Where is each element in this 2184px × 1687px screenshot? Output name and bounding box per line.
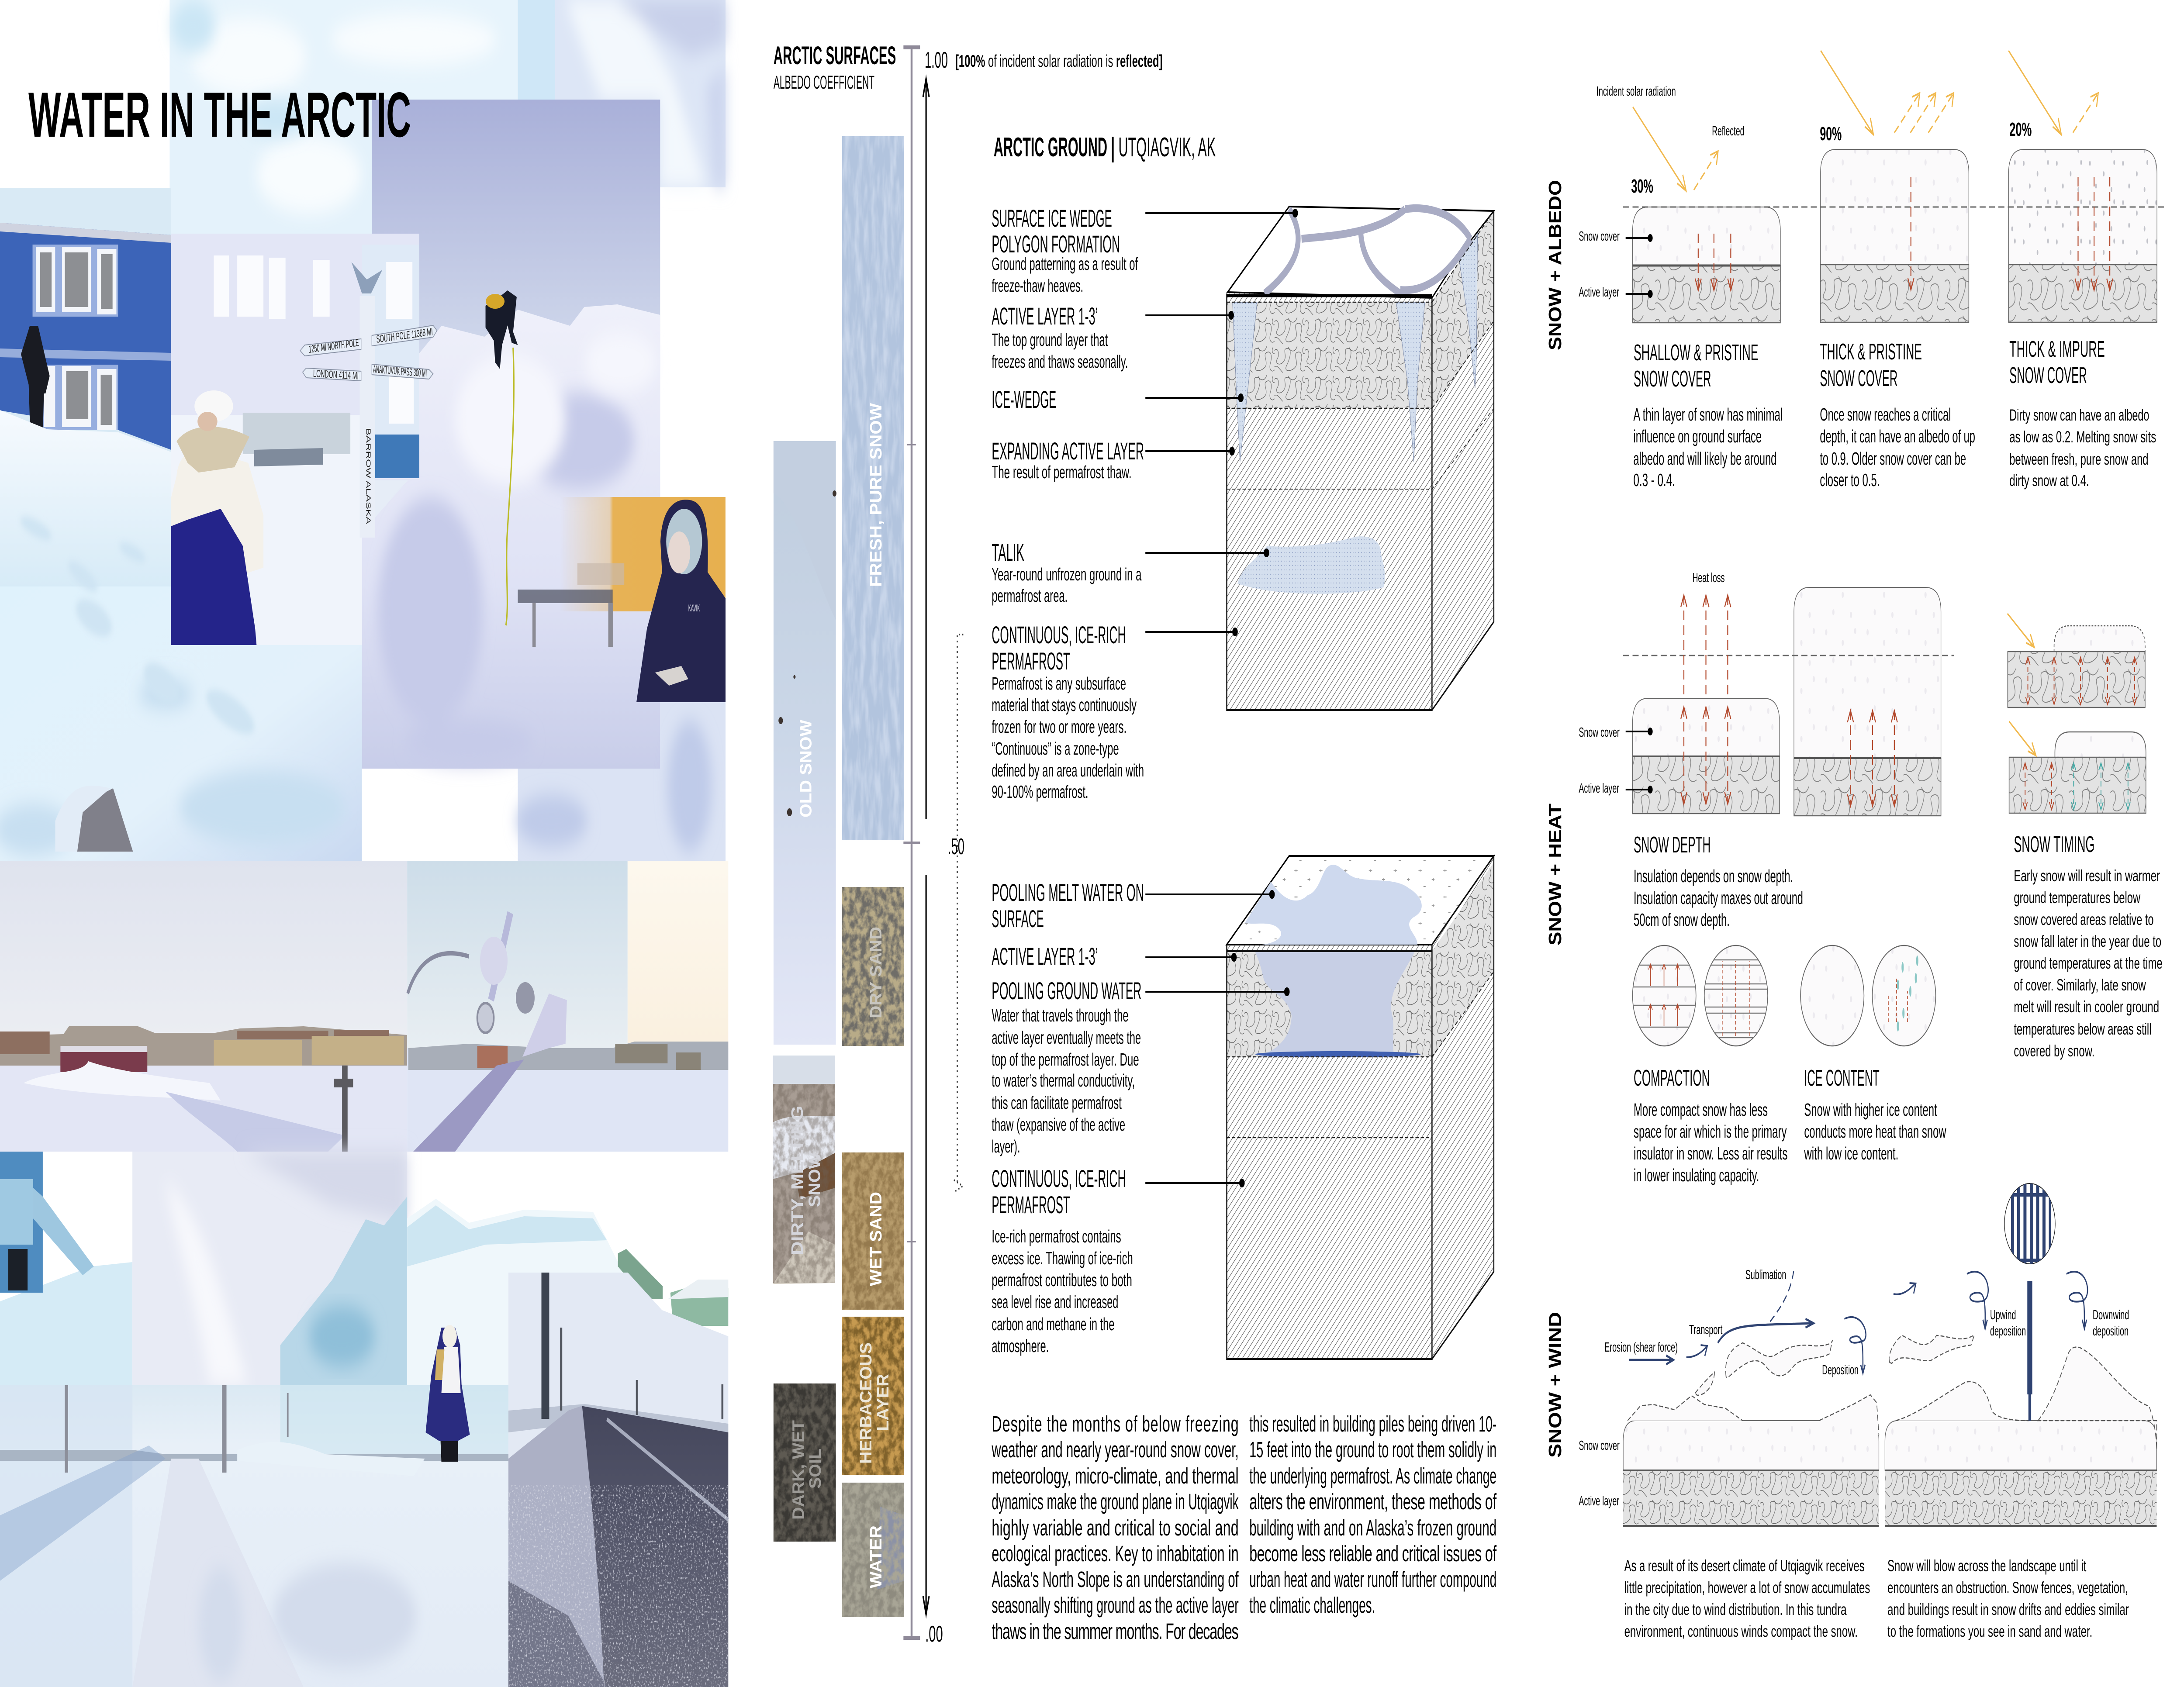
text: obstruction: Snow will blow across the landscape until it bbox=[1887, 1557, 2087, 1575]
leaders bbox=[1626, 235, 1652, 297]
arrow: down to low albedo bbox=[923, 875, 929, 1615]
callout: continuous permafrost: Permafrost is any subsurface bbox=[992, 674, 1126, 694]
section label: SNOW + ALBEDO bbox=[1545, 180, 1565, 350]
text: thick and impure: as low as 0.2. Melting snow sits bbox=[2009, 428, 2156, 446]
text: thick and pristine: to 0.9. Older snow cover can be bbox=[1820, 449, 1966, 469]
callout: continuous permafrost: Ice-rich permafrost contains bbox=[992, 1227, 1121, 1247]
photo: woman with sign post bbox=[171, 234, 437, 645]
callout: surface ice wedge polygon formation: Ground patterning as a result of bbox=[992, 254, 1138, 274]
annotations: Snow cover bbox=[1579, 1439, 1620, 1453]
scale labels bbox=[925, 48, 1162, 1647]
text: shallow and pristine: SNOW COVER bbox=[1634, 367, 1711, 392]
text: snow depth bbox=[1634, 833, 1803, 930]
diagram: open snow surface bbox=[1623, 1395, 1879, 1526]
text block: intro paragraph: 15 feet into the ground to root them solidly in bbox=[1249, 1438, 1496, 1463]
annotations: Heat loss bbox=[1693, 571, 1724, 585]
photo: wind-sculpted snow upper right bbox=[518, 0, 726, 187]
text: snow timing: snow covered areas relative to bbox=[2014, 911, 2154, 928]
text: ice content: with low ice content. bbox=[1804, 1144, 1898, 1164]
text: snow depth: Insulation capacity maxes out around bbox=[1634, 888, 1803, 908]
callout: continuous permafrost: carbon and methane in the bbox=[992, 1314, 1114, 1335]
callout: continuous permafrost: 90-100% permafrost. bbox=[992, 782, 1088, 802]
photo: climber on snow pile bbox=[362, 100, 660, 769]
text: thick and pristine: THICK & PRISTINE bbox=[1820, 340, 1922, 365]
text: snow timing: covered by snow. bbox=[2014, 1042, 2094, 1060]
text: snow timing: ground temperatures at the time bbox=[2014, 954, 2163, 972]
callout: continuous permafrost: PERMAFROST bbox=[992, 648, 1070, 675]
arrows: timing heat bbox=[2023, 657, 2137, 810]
woman figure bbox=[171, 449, 263, 597]
measuring rope bbox=[506, 348, 514, 625]
photo: snow swirl bbox=[132, 1152, 407, 1385]
text: compaction: space for air which is the primary bbox=[1634, 1122, 1787, 1142]
circle: high compaction bbox=[1704, 945, 1768, 1046]
arrowheads: reflected bbox=[1711, 93, 2098, 165]
front face hatch bbox=[1227, 293, 1432, 710]
annotations: Downwind bbox=[2093, 1308, 2129, 1322]
text: obstruction: and buildings result in snow drifts and eddies similar bbox=[1887, 1601, 2129, 1618]
diagram: deep snow depth bbox=[1794, 587, 1941, 816]
annotations: Reflected bbox=[1712, 124, 1744, 138]
callout: continuous permafrost bbox=[992, 1165, 1133, 1356]
photo collage: upper group bbox=[0, 0, 728, 1687]
sign post: SOUTH POLE 11388 MI bbox=[376, 326, 433, 345]
text: snow depth: 50cm of snow depth. bbox=[1634, 910, 1730, 930]
swatch: water bbox=[842, 1483, 904, 1617]
text block: intro paragraph: this resulted in building piles being driven 10- bbox=[1249, 1412, 1496, 1437]
albedo axis bbox=[903, 45, 920, 1640]
callout: surface ice wedge polygon formation: POLYGON FORMATION bbox=[992, 231, 1120, 258]
text: ice content: ICE CONTENT bbox=[1804, 1066, 1880, 1091]
swatch: herbaceous layer: HERBACEOUS bbox=[857, 1342, 875, 1464]
arrows: absorbed radiation bbox=[1695, 177, 2113, 290]
swatch: dirty, melting snow bbox=[773, 1056, 835, 1284]
wind arrows bbox=[1629, 1283, 1916, 1364]
sign post: LONDON 4114 MI bbox=[313, 368, 359, 382]
photo: town panorama bbox=[0, 861, 407, 1152]
photo: white snow mound bbox=[407, 1199, 628, 1385]
panel: snow + heat bbox=[1545, 571, 2163, 1186]
figure on street bbox=[425, 1325, 470, 1462]
text block: intro paragraph: become less reliable and critical issues of bbox=[1249, 1542, 1496, 1566]
drifting snow clouds bbox=[1695, 1335, 1974, 1395]
diagram: shallow snow depth bbox=[1633, 698, 1780, 814]
annotations: Deposition bbox=[1822, 1363, 1859, 1377]
dashed reference line bbox=[1623, 655, 1954, 656]
callout: pooling ground water: top of the permafrost layer. Due bbox=[992, 1050, 1139, 1070]
person in navy parka bbox=[636, 500, 726, 702]
arrows: timing sun bbox=[2008, 614, 2036, 756]
annotations: Upwind bbox=[1990, 1308, 2016, 1322]
text: snow timing: SNOW TIMING bbox=[2014, 832, 2094, 857]
callout: pooling ground water: layer). bbox=[992, 1137, 1020, 1157]
arrows: timing cool bbox=[2071, 763, 2130, 810]
text block: intro paragraph: meteorology, micro-climate, and thermal bbox=[992, 1464, 1239, 1489]
photo: lower right blown snow bbox=[516, 702, 726, 861]
text: shallow and pristine: albedo and will likely be around bbox=[1633, 449, 1776, 469]
annotations: Snow cover bbox=[1579, 725, 1620, 740]
callout: continuous permafrost: sea level rise and increased bbox=[992, 1292, 1118, 1312]
scale labels: [100% of incident solar radiation is reflected] bbox=[955, 51, 1162, 70]
text: shallow and pristine bbox=[1633, 341, 1783, 490]
block outline bbox=[1227, 211, 1494, 710]
text block: intro paragraph: weather and nearly year-round snow cover, bbox=[992, 1438, 1239, 1463]
text: compaction: in lower insulating capacity. bbox=[1634, 1166, 1759, 1186]
text: ice content: conducts more heat than snow bbox=[1804, 1122, 1946, 1142]
annotations: deposition bbox=[2093, 1324, 2129, 1339]
text: thick and impure bbox=[2009, 337, 2156, 490]
callout: pooling ground water: thaw (expansive of the active bbox=[992, 1115, 1125, 1135]
callout: ice-wedge: ICE-WEDGE bbox=[992, 386, 1056, 413]
text: compaction bbox=[1634, 1066, 1787, 1186]
text: thick and impure: dirty snow at 0.4. bbox=[2009, 472, 2089, 490]
dashed layer lines bbox=[1227, 211, 1494, 489]
text: shallow and pristine: 0.3 - 0.4. bbox=[1633, 470, 1675, 490]
side face hatch bbox=[1432, 856, 1494, 1359]
photo: ice rubble at top bbox=[169, 0, 518, 234]
callout: talik: Year-round unfrozen ground in a bbox=[992, 565, 1142, 585]
callout: active layer: ACTIVE LAYER 1-3’ bbox=[992, 943, 1098, 970]
photo: blue building with person bbox=[0, 188, 171, 586]
text: snow timing: snow fall later in the year due to bbox=[2014, 932, 2161, 950]
swatch: fresh pure snow bbox=[842, 136, 904, 840]
photo: anemometer over town bbox=[407, 861, 728, 1152]
annotations: Transport bbox=[1689, 1323, 1723, 1337]
snow surface bbox=[1227, 856, 1494, 945]
panel: snow + wind bbox=[1545, 1179, 2156, 1640]
arrows: reflected bbox=[1694, 93, 2098, 190]
callout: pooling ground water: POOLING GROUND WATER bbox=[992, 977, 1141, 1004]
text: desert climate: As a result of its desert climate of Utqiagvik receives bbox=[1624, 1557, 1865, 1575]
annotations: Active layer bbox=[1579, 781, 1619, 796]
photo: portrait with orange background bbox=[518, 497, 726, 702]
cars and low buildings bbox=[254, 448, 323, 466]
dotted axis arrow bbox=[954, 635, 963, 1192]
text: snow timing: ground temperatures below bbox=[2014, 889, 2141, 907]
snow fence bbox=[2027, 1281, 2032, 1421]
active layer bbox=[1227, 211, 1494, 408]
photo: snow footprints lower left bbox=[0, 512, 362, 861]
callout: continuous permafrost: CONTINUOUS, ICE-RICH bbox=[992, 1165, 1126, 1192]
callout: continuous permafrost bbox=[992, 621, 1144, 802]
text: ice content bbox=[1804, 1066, 1946, 1164]
eddy arrows bbox=[1845, 1272, 2087, 1373]
callout: active layer: The top ground layer that bbox=[992, 330, 1108, 350]
diagram: ground block with ice wedges bbox=[992, 205, 1494, 802]
swatch: water: WATER bbox=[867, 1525, 885, 1588]
callout: continuous permafrost: atmosphere. bbox=[992, 1336, 1049, 1356]
diagram: early snow timing bbox=[2009, 732, 2146, 813]
text: desert climate: environment, continuous winds compact the snow. bbox=[1624, 1622, 1858, 1640]
swatch: dirty, melting snow: DIRTY, MELTING bbox=[788, 1106, 806, 1255]
text: obstruction bbox=[1887, 1557, 2129, 1640]
text: thick and impure: Dirty snow can have an albedo bbox=[2009, 406, 2149, 424]
scale labels: .50 bbox=[948, 835, 964, 859]
annotations bbox=[1579, 571, 1724, 796]
callout: surface ice wedge polygon formation: SURFACE ICE WEDGE bbox=[992, 205, 1112, 232]
callout: pooling melt water: POOLING MELT WATER ON bbox=[992, 879, 1144, 906]
swatch: dry sand bbox=[842, 887, 904, 1046]
annotations: Active layer bbox=[1579, 285, 1619, 300]
callout: continuous permafrost: PERMAFROST bbox=[992, 1191, 1070, 1218]
dashed reference line bbox=[1623, 206, 2164, 208]
circle: low compaction bbox=[1633, 945, 1697, 1046]
callout: pooling ground water bbox=[992, 977, 1141, 1157]
sign post bbox=[300, 262, 437, 538]
callout: talik: permafrost area. bbox=[992, 586, 1068, 606]
talik bbox=[1237, 536, 1385, 594]
ice wedges bbox=[1233, 234, 1478, 462]
diagram: snow surface with fence bbox=[1885, 1347, 2156, 1526]
text block: intro paragraph: highly variable and critical to social and bbox=[992, 1516, 1239, 1541]
text block: intro paragraph: Alaska’s North Slope is an understanding of bbox=[992, 1567, 1239, 1592]
photo: stairs and snow plain bbox=[0, 1152, 132, 1385]
text block: intro paragraph: thaws in the summer months. For decades bbox=[992, 1619, 1239, 1644]
figure standing on snow bbox=[21, 326, 50, 437]
arrow: sublimation bbox=[1770, 1271, 1794, 1321]
text block: intro paragraph: urban heat and water runoff further compound bbox=[1249, 1567, 1496, 1592]
text: shallow and pristine: SHALLOW & PRISTINE bbox=[1634, 341, 1759, 366]
annotations: 90% bbox=[1820, 123, 1842, 145]
active layer bbox=[1227, 862, 1494, 1057]
heading: arctic surfaces: ALBEDO COEFFICIENT bbox=[774, 72, 874, 93]
callout: active layer bbox=[992, 303, 1128, 372]
text block: intro paragraph: Despite the months of below freezing bbox=[992, 1412, 1239, 1437]
swatch: dirty, melting snow: SNOW bbox=[805, 1152, 824, 1207]
text: desert climate: in the city due to wind distribution. In this tundra bbox=[1624, 1601, 1847, 1618]
callout: surface ice wedge polygon formation bbox=[992, 205, 1138, 296]
text block: intro paragraph: the underlying permafrost. As climate change bbox=[1249, 1464, 1496, 1489]
panel: arctic surfaces albedo scale bbox=[773, 42, 1162, 1647]
swatch: dry sand: DRY SAND bbox=[867, 927, 885, 1018]
callout: active layer: freezes and thaws seasonally. bbox=[992, 352, 1128, 372]
arrows: heat loss bbox=[1681, 595, 1897, 806]
callout: active layer: ACTIVE LAYER 1-3’ bbox=[992, 303, 1098, 330]
text: compaction: insulator in snow. Less air results bbox=[1634, 1144, 1787, 1164]
callout: surface ice wedge polygon formation: freeze-thaw heaves. bbox=[992, 276, 1083, 296]
text: shallow and pristine: influence on ground surface bbox=[1633, 427, 1762, 447]
text block: intro paragraph: dynamics make the ground plane in Utqiagvik bbox=[992, 1490, 1239, 1515]
pooling melt water bbox=[1245, 865, 1422, 945]
text: snow timing: temperatures below areas still bbox=[2014, 1020, 2151, 1038]
callout: continuous permafrost: permafrost contributes to both bbox=[992, 1270, 1132, 1290]
text: snow depth: Insulation depends on snow depth. bbox=[1634, 866, 1793, 887]
text: snow depth: SNOW DEPTH bbox=[1634, 833, 1711, 858]
callout: talik: TALIK bbox=[992, 539, 1024, 566]
callout: pooling ground water: Water that travels through the bbox=[992, 1006, 1129, 1026]
annotations: Active layer bbox=[1579, 1494, 1619, 1508]
text block: intro paragraph: the climatic challenges. bbox=[1249, 1593, 1375, 1618]
swatch: old snow bbox=[774, 441, 836, 1045]
text block: intro paragraph: building with and on Alaska’s frozen ground bbox=[1249, 1516, 1496, 1541]
text: compaction: More compact snow has less bbox=[1634, 1100, 1768, 1120]
arrow: up to high albedo bbox=[923, 79, 929, 819]
text: ice content: Snow with higher ice content bbox=[1804, 1100, 1937, 1120]
text: thick and impure: SNOW COVER bbox=[2009, 363, 2087, 388]
text: snow timing bbox=[2014, 832, 2163, 1060]
callout: pooling ground water: to water’s thermal conductivity, bbox=[992, 1071, 1135, 1091]
heading: arctic surfaces: ARCTIC SURFACES bbox=[774, 42, 896, 70]
diagram: late snow timing bbox=[2008, 626, 2145, 707]
text: desert climate: little precipitation, however a lot of snow accumulates bbox=[1624, 1579, 1870, 1597]
callout: pooling ground water: this can facilitate permafrost bbox=[992, 1093, 1122, 1113]
sign post: ANAKTUVUK PASS 300 MI bbox=[373, 364, 427, 379]
block outline bbox=[1227, 856, 1494, 1359]
swatch: dark wet soil: SOIL bbox=[806, 1449, 824, 1489]
diagram: thick impure snow bbox=[2008, 149, 2157, 322]
heading: arctic ground: ARCTIC GROUND | UTQIAGVIK, AK bbox=[994, 132, 1216, 162]
side face hatch bbox=[1432, 211, 1494, 710]
scale labels: 1.00 bbox=[925, 48, 948, 73]
road surface bbox=[581, 1406, 728, 1687]
circle: high ice content bbox=[1872, 945, 1936, 1046]
climber figure bbox=[486, 290, 518, 369]
text: obstruction: encounters an obstruction. Snow fences, vegetation, bbox=[1887, 1579, 2128, 1597]
callout: pooling ground water: active layer eventually meets the bbox=[992, 1028, 1141, 1048]
text: thick and pristine bbox=[1820, 340, 1975, 490]
annotations: Sublimation bbox=[1745, 1268, 1786, 1282]
text: snow timing: Early snow will result in warmer bbox=[2014, 867, 2160, 885]
annotations: Incident solar radiation bbox=[1597, 84, 1676, 99]
diagram: shallow snow bbox=[1633, 207, 1780, 323]
anemometer instrument bbox=[408, 913, 510, 1000]
text: snow timing: melt will result in cooler ground bbox=[2014, 998, 2159, 1016]
heading: arctic surfaces bbox=[774, 42, 896, 93]
text block: intro paragraph bbox=[992, 1412, 1496, 1644]
person in navy parka: KAVIK bbox=[688, 603, 700, 614]
text block: intro paragraph: alters the environment, these methods of bbox=[1249, 1490, 1496, 1515]
title: WATER IN THE ARCTIC bbox=[28, 79, 411, 150]
callout: expanding active layer: The result of permafrost thaw. bbox=[992, 462, 1132, 483]
text block: intro paragraph: ecological practices. Key to inhabitation in bbox=[992, 1542, 1239, 1566]
annotations: 30% bbox=[1631, 176, 1653, 197]
annotations: 20% bbox=[2009, 119, 2032, 140]
swatch: herbaceous layer: LAYER bbox=[874, 1374, 892, 1431]
callout: expanding active layer: EXPANDING ACTIVE LAYER bbox=[992, 438, 1144, 465]
text block: intro paragraph: seasonally shifting ground as the active layer bbox=[992, 1593, 1239, 1618]
text: thick and pristine: depth, it can have an albedo of up bbox=[1820, 427, 1975, 447]
arrows: incident solar bbox=[1633, 51, 2061, 191]
photo: house and windswept road bbox=[508, 1152, 728, 1687]
scale labels: .00 bbox=[925, 1622, 943, 1647]
dashed layer lines bbox=[1227, 972, 1494, 1138]
section label: SNOW + WIND bbox=[1545, 1312, 1565, 1458]
callout: continuous permafrost: CONTINUOUS, ICE-RICH bbox=[992, 621, 1126, 649]
text: compaction: COMPACTION bbox=[1634, 1066, 1710, 1091]
annotations: deposition bbox=[1990, 1324, 2026, 1339]
text: thick and pristine: Once snow reaches a critical bbox=[1820, 405, 1951, 425]
swatch: dark wet soil: DARK, WET bbox=[789, 1420, 808, 1520]
annotations: Erosion (shear force) bbox=[1604, 1340, 1678, 1355]
swatch: wet sand: WET SAND bbox=[867, 1192, 885, 1286]
leader lines bbox=[1145, 210, 1297, 635]
diagram: thick pristine snow bbox=[1821, 149, 1969, 322]
leader lines bbox=[1145, 891, 1289, 1187]
callout: continuous permafrost: excess ice. Thawing of ice-rich bbox=[992, 1249, 1133, 1269]
swatch: herbaceous layer bbox=[842, 1317, 904, 1475]
text: shallow and pristine: A thin layer of snow has minimal bbox=[1633, 405, 1783, 425]
callout: continuous permafrost: frozen for two or more years. bbox=[992, 717, 1127, 737]
frozen water lens bbox=[1255, 1051, 1420, 1057]
text: thick and pristine: closer to 0.5. bbox=[1820, 470, 1880, 490]
callout: expanding active layer bbox=[992, 438, 1144, 483]
fence detail circle bbox=[2004, 1179, 2055, 1271]
callout: pooling melt water: SURFACE bbox=[992, 905, 1044, 932]
sign post: 1250 MI NORTH POLE bbox=[308, 337, 359, 355]
callout: pooling melt water bbox=[992, 879, 1144, 932]
panel: snow + albedo bbox=[1545, 51, 2164, 490]
swatch: dark wet soil bbox=[774, 1383, 836, 1542]
sign post: BARROW ALASKA bbox=[365, 428, 372, 524]
callout: continuous permafrost: material that stays continuously bbox=[992, 695, 1137, 715]
diagram: ground block with pooling water bbox=[992, 856, 1494, 1359]
swatch: wet sand bbox=[842, 1152, 904, 1310]
callout: continuous permafrost: “Continuous” is a zone-type bbox=[992, 739, 1119, 759]
swatch: old snow: OLD SNOW bbox=[796, 719, 815, 818]
annotations: Snow cover bbox=[1579, 229, 1620, 244]
text: thick and impure: between fresh, pure snow and bbox=[2009, 450, 2149, 468]
section label: SNOW + HEAT bbox=[1545, 804, 1565, 945]
text: obstruction: to the formations you see in sand and water. bbox=[1887, 1622, 2092, 1640]
swatch: fresh pure snow: FRESH, PURE SNOW bbox=[867, 403, 885, 587]
callout: continuous permafrost: defined by an area underlain with bbox=[992, 761, 1144, 781]
callout: talik bbox=[992, 539, 1142, 606]
front face hatch bbox=[1227, 945, 1432, 1359]
text: snow timing: of cover. Similarly, late snow bbox=[2014, 976, 2146, 994]
photo: street and figure bbox=[0, 1325, 508, 1687]
text: desert climate bbox=[1624, 1557, 1870, 1640]
photo: blue ice mound bbox=[280, 1197, 407, 1385]
text: thick and pristine: SNOW COVER bbox=[1820, 366, 1897, 391]
leaders bbox=[1626, 728, 1652, 793]
annotations bbox=[1579, 1268, 2129, 1508]
circle: low ice content bbox=[1800, 945, 1864, 1046]
frozen ground surface with polygons bbox=[1227, 207, 1494, 298]
pooling ground water bbox=[1255, 951, 1415, 1057]
text: thick and impure: THICK & IMPURE bbox=[2009, 337, 2105, 362]
annotations bbox=[1579, 84, 2032, 300]
